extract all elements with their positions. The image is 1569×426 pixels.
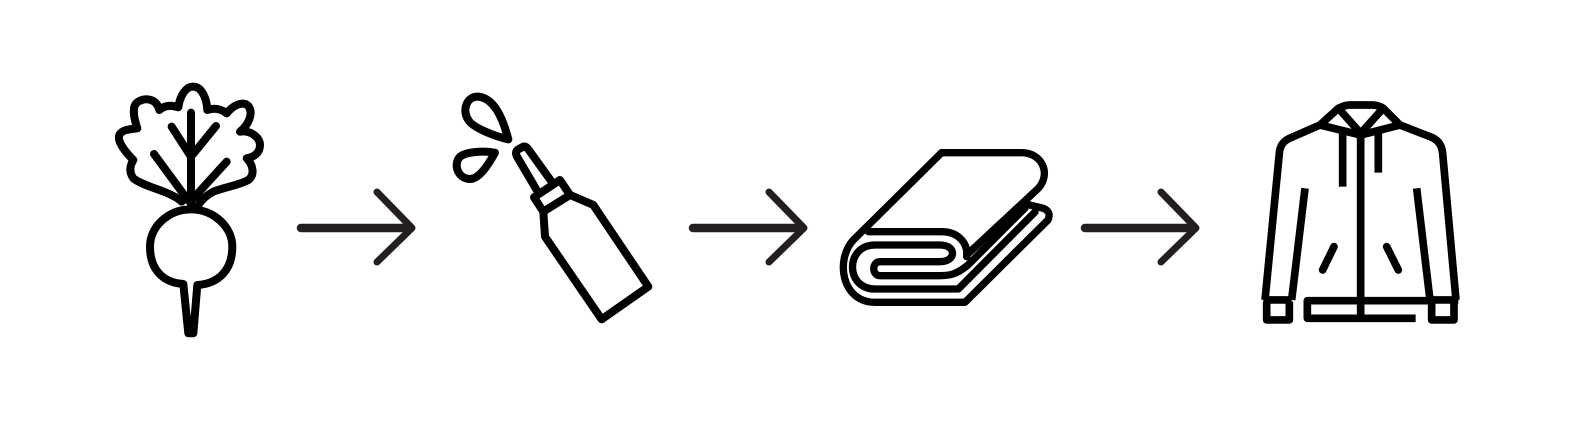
bottle body [543, 195, 648, 319]
hood [1320, 105, 1400, 125]
drop: lower [457, 152, 495, 179]
jacket body and sleeves [1265, 125, 1320, 300]
hem [1307, 301, 1430, 318]
hood strings [1331, 132, 1354, 187]
bottle nozzle [516, 147, 552, 190]
icon: dropper bottle [457, 97, 648, 319]
drop: upper [465, 97, 508, 139]
bottle cap [534, 180, 570, 212]
arrow: beet to extract [301, 192, 412, 262]
icon: beet [119, 87, 260, 333]
cuffs [1267, 302, 1289, 320]
zip [1349, 133, 1372, 317]
icon: jacket [1263, 105, 1458, 320]
pockets [1323, 247, 1334, 270]
icon: rolled fabric [843, 153, 1049, 302]
arrow: fabric to jacket [1085, 192, 1196, 262]
arrow: extract to fabric [693, 192, 804, 262]
